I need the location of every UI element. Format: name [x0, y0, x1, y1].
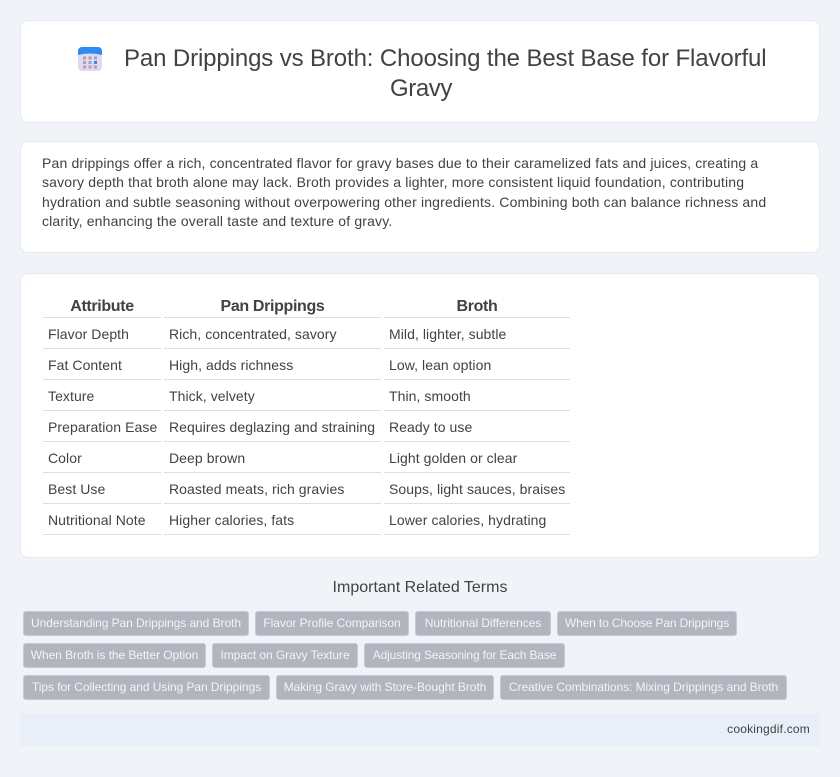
intro paragraph: savory depth that broth alone may lack. Broth provides a lighter, more consistent liquid foundation, contributing — [42, 174, 744, 190]
intro paragraph: clarity, enhancing the overall taste and texture of gravy. — [42, 213, 392, 229]
intro paragraph — [42, 155, 766, 229]
comparison table: Soups, light sauces, braises — [389, 481, 565, 497]
intro paragraph: Pan drippings offer a rich, concentrated flavor for gravy bases due to their caramelized fats and juices, creating a — [42, 155, 758, 171]
comparison table: Best Use — [48, 481, 105, 497]
icon: calendar — [78, 47, 102, 71]
intro paragraph: hydration and subtle seasoning without overpowering other ingredients. Combining both can balance richness and — [42, 194, 766, 210]
comparison table: Thick, velvety — [169, 388, 255, 404]
comparison table: Nutritional Note — [48, 512, 146, 528]
comparison table: Lower calories, hydrating — [389, 512, 546, 528]
comparison table: Fat Content — [48, 357, 122, 373]
comparison table: High, adds richness — [169, 357, 293, 373]
comparison table: Preparation Ease — [48, 419, 157, 435]
related term tags: When to Choose Pan Drippings — [565, 616, 729, 630]
related term tags: Tips for Collecting and Using Pan Drippings — [32, 680, 261, 694]
title: Pan Drippings vs Broth: Choosing the Best Base for Flavorful — [124, 45, 766, 72]
related term tags: Nutritional Differences — [425, 616, 541, 630]
comparison table: Texture — [48, 388, 94, 404]
comparison table: Roasted meats, rich gravies — [169, 481, 344, 497]
comparison table: Low, lean option — [389, 357, 491, 373]
title — [124, 45, 766, 102]
comparison table: Rich, concentrated, savory — [169, 326, 337, 342]
comparison table: Color — [48, 450, 82, 466]
heading: related terms: Important Related Terms — [333, 579, 507, 596]
comparison table: Broth — [457, 298, 497, 315]
comparison table: Light golden or clear — [389, 450, 517, 466]
related term tags — [23, 611, 787, 700]
related term tags: When Broth is the Better Option — [31, 648, 198, 662]
comparison table: Higher calories, fats — [169, 512, 294, 528]
comparison table: Thin, smooth — [389, 388, 471, 404]
title: Gravy — [390, 75, 452, 102]
related term tags: Impact on Gravy Texture — [220, 648, 350, 662]
comparison table panel — [20, 273, 820, 558]
comparison table: Flavor Depth — [48, 326, 129, 342]
comparison table: Requires deglazing and straining — [169, 419, 375, 435]
comparison table: Pan Drippings — [221, 298, 324, 315]
header panel — [20, 20, 820, 123]
comparison table: Mild, lighter, subtle — [389, 326, 506, 342]
related term tags: Adjusting Seasoning for Each Base — [373, 648, 556, 662]
related term tags: Creative Combinations: Mixing Drippings and Broth — [509, 680, 778, 694]
footer bar — [20, 713, 820, 746]
footer source text: cookingdif.com — [727, 722, 810, 736]
related term tags: Making Gravy with Store-Bought Broth — [284, 680, 486, 694]
comparison table: Attribute — [70, 298, 134, 315]
intro text panel — [20, 141, 820, 253]
related term tags: Understanding Pan Drippings and Broth — [31, 616, 241, 630]
comparison table: Deep brown — [169, 450, 245, 466]
comparison table: Ready to use — [389, 419, 472, 435]
comparison table — [43, 298, 570, 535]
related term tags: Flavor Profile Comparison — [263, 616, 401, 630]
